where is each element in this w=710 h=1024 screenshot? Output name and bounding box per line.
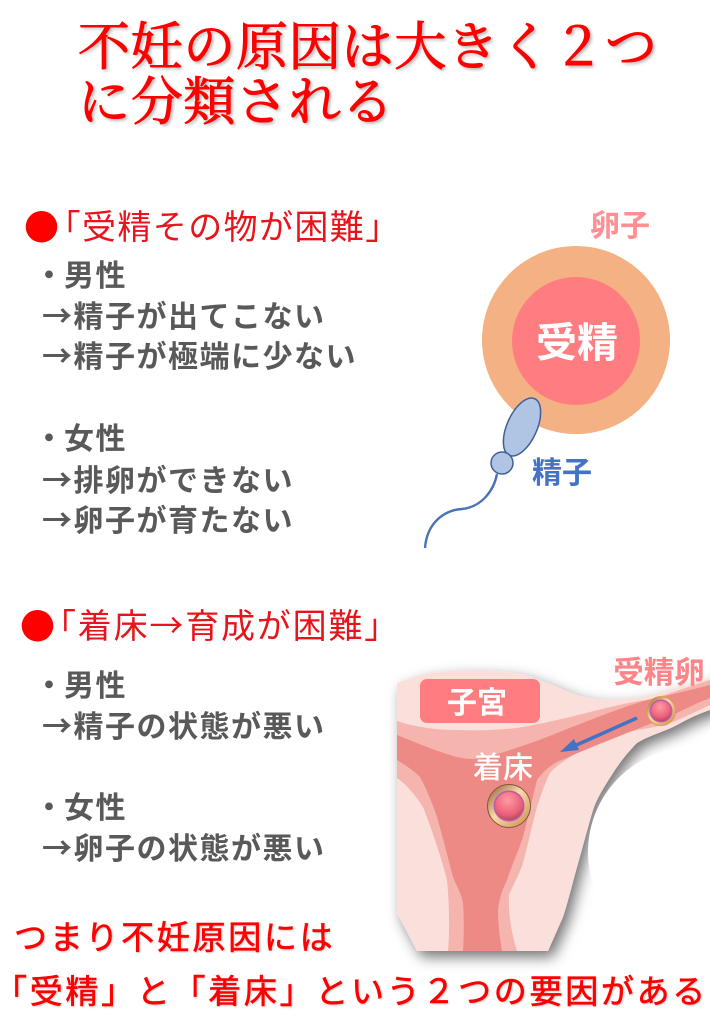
label: implantation: 着床 (473, 743, 533, 787)
uterus middle layer (397, 680, 710, 951)
text block: female condition (34, 783, 326, 868)
label: fertilization: 受精 (536, 309, 618, 369)
label: sperm: 精子 (532, 448, 592, 492)
sperm (425, 393, 548, 548)
heading: fertilization difficulty: ● (24, 200, 59, 251)
egg inner circle (512, 277, 640, 405)
white circle cutout (588, 747, 710, 957)
conclusion text: 「受精」と「着床」という２つの要因がある (0, 965, 708, 1013)
text block: female condition: ・女性 (34, 783, 127, 827)
text block: male causes: →精子が極端に少ない (42, 332, 357, 376)
text block: female causes: →排卵ができない (42, 456, 294, 500)
title (78, 5, 658, 135)
text block: male condition (34, 661, 326, 746)
text block: male condition: →精子の状態が悪い (42, 702, 326, 746)
text block: male causes (34, 251, 357, 376)
text block: female causes: ・女性 (34, 414, 127, 458)
panel: implantation difficulty text (20, 599, 400, 868)
conclusion text: つまり不妊原因には (14, 911, 335, 959)
uterus inner cavity (397, 685, 710, 951)
uterus outer wall (397, 670, 710, 951)
egg outer circle (482, 246, 670, 434)
fertilized egg in tube (646, 696, 676, 726)
title: に分類される (78, 60, 394, 135)
text block: male causes: ・男性 (34, 251, 127, 295)
heading: implantation difficulty: 「着床→育成が困難」 (42, 599, 400, 648)
arrow: movement to uterus (560, 718, 637, 752)
diagram: uterus (392, 648, 710, 968)
title: 不妊の原因は大きく２つ (78, 5, 658, 80)
text block: female causes: →卵子が育たない (42, 496, 294, 540)
conclusion text (0, 911, 708, 1013)
label: fertilized egg: 受精卵 (613, 648, 705, 692)
diagram: fertilization (424, 201, 670, 548)
label box: uterus (420, 678, 540, 723)
label box: uterus: 子宮 (447, 678, 507, 722)
text block: female condition: →卵子の状態が悪い (42, 824, 326, 868)
label: egg: 卵子 (590, 201, 650, 245)
implanted egg (488, 784, 530, 828)
panel: fertilization difficulty text (24, 200, 401, 540)
text block: male condition: ・男性 (34, 661, 127, 705)
text block: male causes: →精子が出てこない (42, 292, 326, 336)
heading: implantation difficulty: ● (20, 599, 55, 650)
text block: female causes (34, 414, 294, 540)
heading: fertilization difficulty: 「受精その物が困難」 (47, 200, 401, 249)
